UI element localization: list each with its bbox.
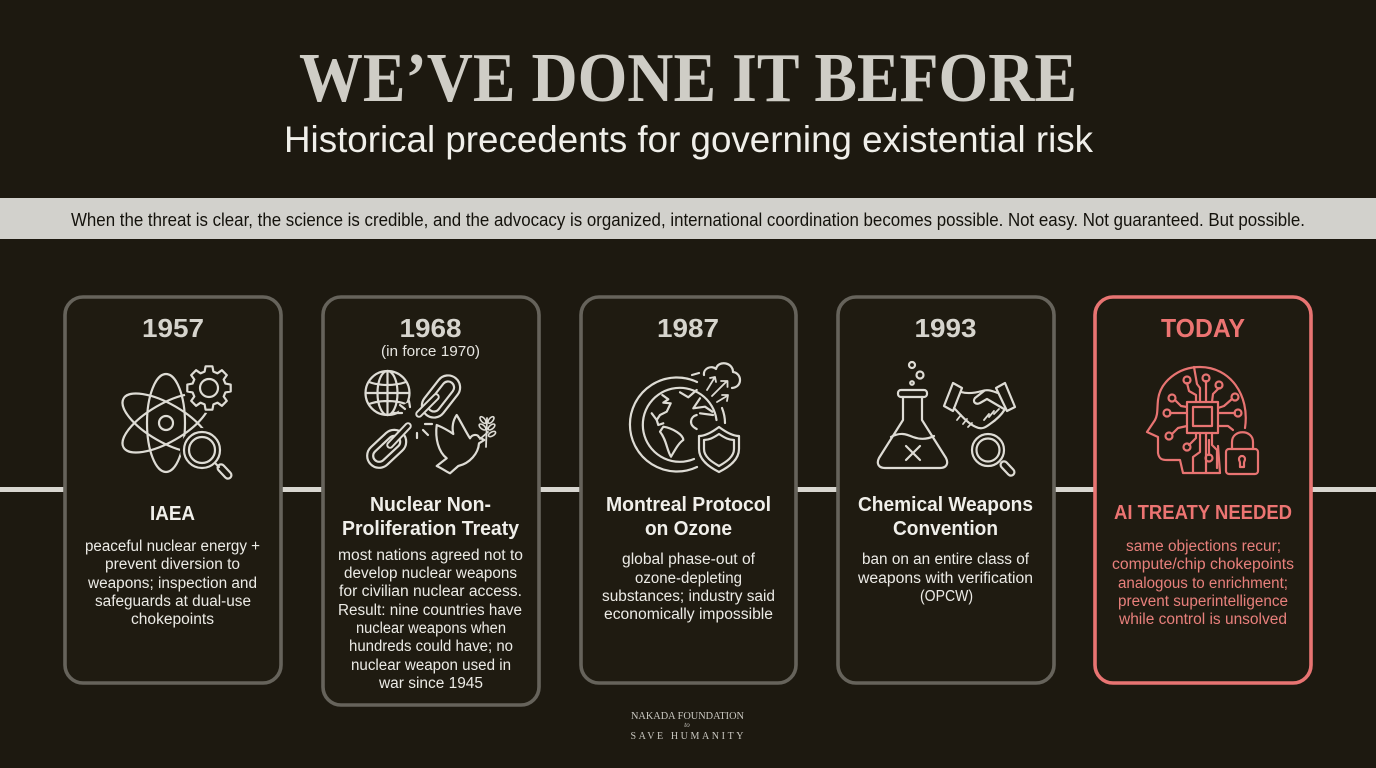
heading: [606, 494, 771, 540]
description: nuclear weapons when: [356, 620, 506, 637]
description: same objections recur;: [1126, 538, 1281, 555]
description: [857, 551, 1033, 605]
panel: 1968 Nuclear Non-Proliferation Treaty: (in force 1970): [381, 343, 480, 360]
heading: Montreal Protocol: [606, 494, 771, 516]
description: Result: nine countries have: [338, 602, 522, 619]
icon: flask, handshake and magnifier: [878, 362, 1016, 477]
title: WE’VE DONE IT BEFORE: [299, 40, 1077, 117]
footer logo: [630, 711, 744, 742]
heading: Chemical Weapons: [858, 494, 1033, 516]
footer logo: to: [684, 721, 690, 729]
description: compute/chip chokepoints: [1112, 556, 1294, 573]
description: economically impossible: [604, 606, 773, 623]
panel: 1968 Nuclear Non-Proliferation Treaty: 1968: [400, 313, 462, 343]
panel: 1968 Nuclear Non-Proliferation Treaty: [323, 297, 539, 705]
icon: globe, broken chain and dove: [362, 371, 496, 473]
subtitle: Historical precedents for governing existential risk: [284, 119, 1093, 160]
description: peaceful nuclear energy +: [85, 538, 260, 555]
description: safeguards at dual-use: [95, 593, 251, 610]
description: weapons with verification: [857, 570, 1033, 587]
panel: 1987 Montreal Protocol: 1987: [657, 313, 719, 343]
description: ozone-depleting: [635, 570, 742, 587]
description: ban on an entire class of: [862, 551, 1030, 568]
description: prevent diversion to: [105, 556, 240, 573]
description: for civilian nuclear access.: [339, 583, 522, 600]
panel: 1957 IAEA: IAEA: [150, 503, 195, 525]
description: [338, 547, 523, 692]
panel: 1993 Chemical Weapons Convention: [838, 297, 1054, 683]
panel: Today AI Treaty Needed: TODAY: [1161, 313, 1245, 343]
footer logo: NAKADA FOUNDATION: [631, 711, 744, 722]
description: war since 1945: [378, 675, 483, 692]
description: (OPCW): [920, 588, 973, 605]
timeline line: [0, 487, 1376, 492]
panel: 1957 IAEA: 1957: [142, 313, 204, 343]
description: [602, 551, 775, 623]
icon: AI head with chip and lock: [1147, 367, 1258, 474]
panel: 1957 IAEA: [65, 297, 281, 683]
footer logo: SAVE HUMANITY: [630, 731, 744, 742]
description: analogous to enrichment;: [1118, 575, 1288, 592]
description: substances; industry said: [602, 588, 775, 605]
description: hundreds could have; no: [349, 638, 513, 655]
heading: Proliferation Treaty: [342, 518, 520, 540]
panel: 1987 Montreal Protocol: [581, 297, 796, 683]
heading: [342, 494, 520, 540]
description: prevent superintelligence: [1118, 593, 1288, 610]
panel: Today AI Treaty Needed: [1095, 297, 1311, 683]
description: [85, 538, 260, 628]
icon: earth, ozone, cloud and shield: [630, 363, 740, 472]
heading: Convention: [893, 518, 998, 540]
description: [1112, 538, 1294, 628]
panel: 1993 Chemical Weapons Convention: 1993: [914, 313, 976, 343]
description: develop nuclear weapons: [344, 565, 517, 582]
description: while control is unsolved: [1118, 611, 1287, 628]
description: nuclear weapon used in: [351, 657, 511, 674]
description: weapons; inspection and: [87, 575, 257, 592]
heading: [858, 494, 1033, 540]
heading: on Ozone: [645, 518, 732, 540]
description: most nations agreed not to: [338, 547, 523, 564]
description: global phase-out of: [622, 551, 756, 568]
heading: Nuclear Non-: [370, 494, 491, 516]
icon: atom with gear and magnifier: [114, 363, 234, 480]
banner: [0, 198, 1376, 239]
description: chokepoints: [131, 611, 214, 628]
panel: Today AI Treaty Needed: AI TREATY NEEDED: [1114, 502, 1292, 524]
